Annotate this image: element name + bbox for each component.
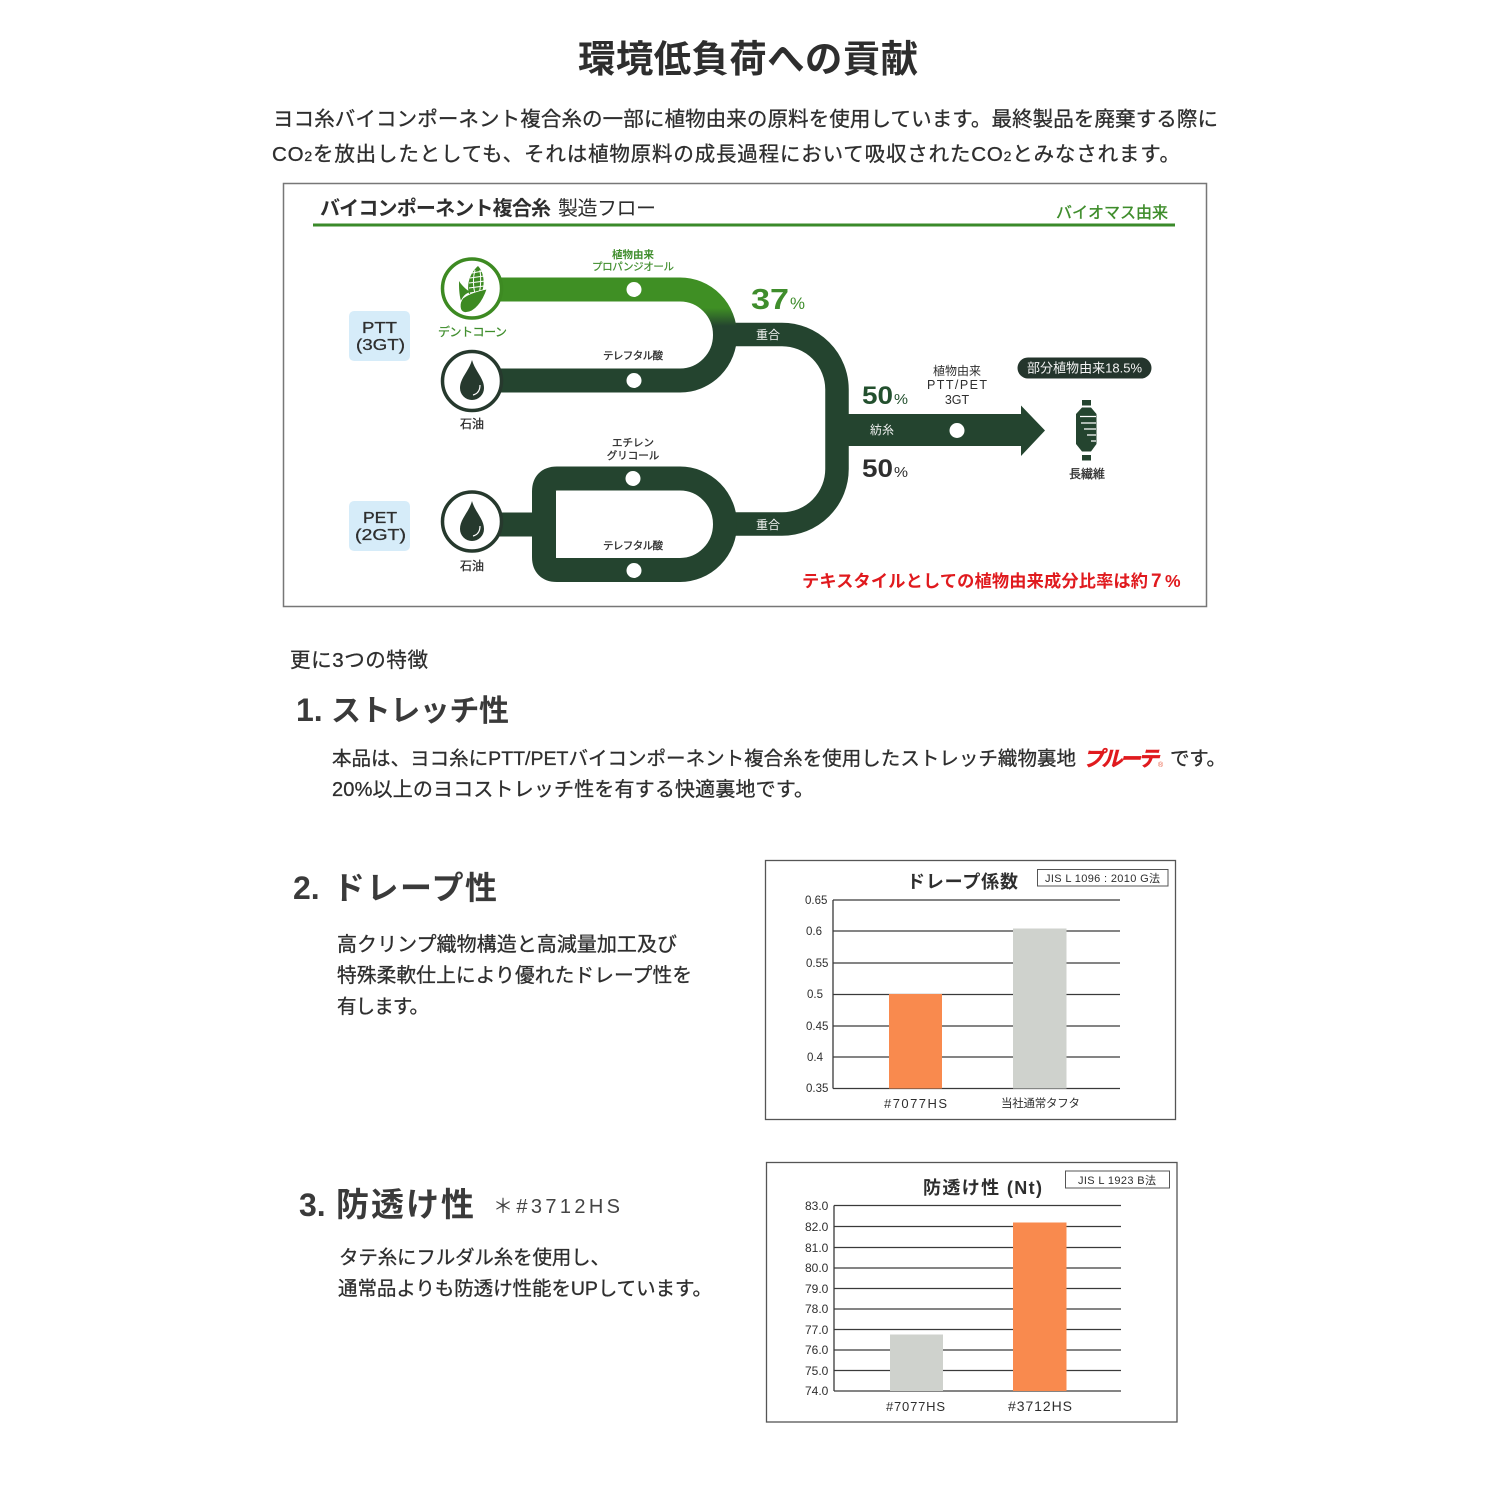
category labels: #7077HS — [886, 1399, 945, 1414]
axis labels: 81.0 — [805, 1241, 829, 1255]
pipe nodes — [626, 282, 964, 578]
category labels — [886, 1398, 1072, 1414]
flow labels: 植物由来 — [612, 248, 654, 261]
axis labels: 0.6 — [806, 926, 822, 938]
body 2 — [337, 933, 692, 1018]
percentage: 50% upper — [862, 382, 908, 410]
flow heading: バイオマス由来 — [1056, 204, 1168, 222]
category labels: #7077HS — [884, 1096, 947, 1111]
heading 1: ストレッチ性 — [331, 695, 509, 728]
section 1: stretch — [296, 692, 1226, 801]
body 3: 通常品よりも防透け性能をUPしています。 — [338, 1278, 712, 1300]
flow labels: 重合 — [756, 328, 780, 342]
axis labels: 77.0 — [805, 1323, 829, 1337]
pill: partly plant-derived: 部分植物由来18.5% — [1027, 360, 1142, 376]
label: PET — [349, 501, 410, 551]
flow labels: 紡糸 — [870, 422, 894, 437]
percentage: 50% upper: % — [894, 391, 908, 408]
axis labels: 76.0 — [805, 1343, 829, 1357]
standard label: JIS L 1096 : 2010 G法 — [1045, 872, 1160, 885]
axis labels: 0.4 — [807, 1052, 824, 1064]
flow labels: 石油 — [460, 417, 484, 431]
product note: ＊#3712HS — [493, 1196, 620, 1218]
grid — [833, 900, 1120, 1088]
merge pipe — [722, 334, 837, 524]
flow heading: 製造フロー — [558, 197, 656, 220]
standard label — [1066, 1171, 1170, 1188]
percentage: 50% lower — [862, 455, 908, 483]
percentage: 37% — [751, 284, 805, 316]
intro text — [272, 108, 1218, 166]
body 2: 高クリンプ織物構造と高減量加工及び — [337, 933, 677, 956]
percentage: 37%: 37 — [751, 284, 789, 316]
body 1: 20%以上のヨコストレッチ性を有する快適裏地です。 — [332, 778, 814, 801]
body 1: です。 — [1170, 748, 1226, 770]
category labels: #3712HS — [1008, 1398, 1072, 1414]
chart title: 防透け性 (Nt) — [923, 1178, 1042, 1198]
standard label: JIS L 1923 B法 — [1078, 1174, 1156, 1187]
axis labels: 0.5 — [807, 989, 823, 1001]
flow heading — [313, 197, 1175, 226]
axis labels: 82.0 — [805, 1220, 829, 1234]
body 1 — [332, 748, 1226, 801]
body 1: ® — [1158, 761, 1164, 769]
icon: oil drop lower — [442, 492, 502, 551]
axis labels: 0.55 — [806, 958, 828, 970]
flow heading: バイコンポーネント複合糸 — [320, 197, 551, 220]
axis labels: 80.0 — [805, 1261, 829, 1275]
label: PTT: (3GT) — [356, 337, 405, 354]
percentage: 50% upper: 50 — [862, 382, 893, 410]
flow labels: テレフタル酸 — [603, 349, 664, 362]
percentage: 50% lower: 50 — [862, 455, 893, 483]
heading 1: 1. — [296, 692, 323, 728]
axis labels: 0.65 — [805, 895, 827, 907]
section 3: opacity — [299, 1186, 712, 1300]
label: PTT: PTT — [362, 320, 397, 337]
flow labels: PTT/PET — [927, 378, 987, 392]
axis labels: 74.0 — [805, 1384, 829, 1398]
callout: plant ratio: % — [1165, 571, 1181, 591]
flow labels: グリコール — [607, 449, 659, 462]
flow labels — [460, 248, 1105, 573]
heading 2: ドレープ性 — [333, 870, 497, 906]
flow labels: 重合 — [756, 518, 780, 532]
label: PTT — [349, 311, 410, 361]
flow labels: 3GT — [945, 393, 970, 407]
flow labels: 植物由来 — [933, 363, 981, 378]
callout: plant ratio: 7 — [1151, 571, 1162, 592]
category labels — [884, 1096, 1080, 1111]
body 1: 本品は、ヨコ糸にPTT/PETバイコンポーネント複合糸を使用したストレッチ織物裏地 — [332, 748, 1076, 770]
axis labels: 0.35 — [806, 1083, 828, 1095]
chart title: ドレープ係数 — [907, 872, 1018, 892]
heading 3: 3. — [299, 1187, 326, 1223]
axis labels: 79.0 — [805, 1282, 829, 1296]
icon: corn — [442, 259, 502, 318]
percentage: 37%: % — [790, 294, 805, 313]
axis labels: 78.0 — [805, 1302, 829, 1316]
chart: opacity — [766, 1162, 1177, 1422]
PTT flow pipe — [495, 290, 725, 380]
axis labels — [805, 895, 828, 1095]
arrow — [840, 406, 1045, 456]
bar: #3712HS — [1013, 1222, 1066, 1391]
axis labels: 75.0 — [805, 1364, 829, 1378]
label: dent corn: デントコーン — [438, 324, 507, 339]
heading 2: 2. — [293, 870, 320, 906]
category labels: 当社通常タフタ — [1001, 1096, 1080, 1110]
PET flow pipe — [495, 478, 725, 570]
pill: partly plant-derived — [1018, 358, 1152, 378]
bar: regular taffeta — [1013, 928, 1066, 1088]
grid — [834, 1206, 1121, 1391]
title: 環境低負荷への貢献 — [578, 38, 918, 80]
flow labels: エチレン — [612, 437, 654, 449]
flow labels: プロパンジオール — [592, 261, 674, 273]
subheading: 更に3つの特徴 — [290, 649, 428, 672]
axis labels: 83.0 — [805, 1199, 829, 1213]
flow labels: 石油 — [460, 559, 484, 573]
standard label — [1038, 870, 1168, 886]
body 2: 有します。 — [337, 996, 429, 1018]
flow labels: 長繊維 — [1069, 467, 1105, 481]
body 3 — [338, 1247, 712, 1300]
bar: #7077HS — [890, 1334, 943, 1391]
bar: #7077HS — [889, 994, 942, 1088]
label: PET: (2GT) — [355, 527, 406, 544]
intro text: CO2を放出したとしても、それは植物原料の成長過程において吸収されたCO2とみなされます。 — [272, 143, 1180, 166]
icon: fiber bobbin — [1076, 400, 1096, 460]
percentage: 50% lower: % — [894, 464, 908, 481]
body 1: プルーテ — [1083, 748, 1161, 771]
axis labels — [805, 1199, 829, 1398]
callout: plant ratio: テキスタイルとしての植物由来成分比率は約 — [802, 571, 1148, 591]
chart: drape coefficient — [766, 860, 1176, 1120]
label: PET: PET — [363, 510, 397, 527]
section 2: drape — [293, 870, 692, 1018]
panel: manufacturing flow — [284, 184, 1206, 606]
axis labels: 0.45 — [806, 1021, 828, 1033]
body 3: タテ糸にフルダル糸を使用し、 — [339, 1247, 610, 1269]
body 2: 特殊柔軟仕上により優れたドレープ性を — [337, 965, 692, 987]
icon: oil drop upper — [442, 352, 502, 410]
flow labels: テレフタル酸 — [603, 539, 664, 552]
intro text: ヨコ糸バイコンポーネント複合糸の一部に植物由来の原料を使用しています。最終製品を廃棄する際に — [273, 108, 1218, 131]
heading 3: 防透け性 — [336, 1186, 474, 1223]
